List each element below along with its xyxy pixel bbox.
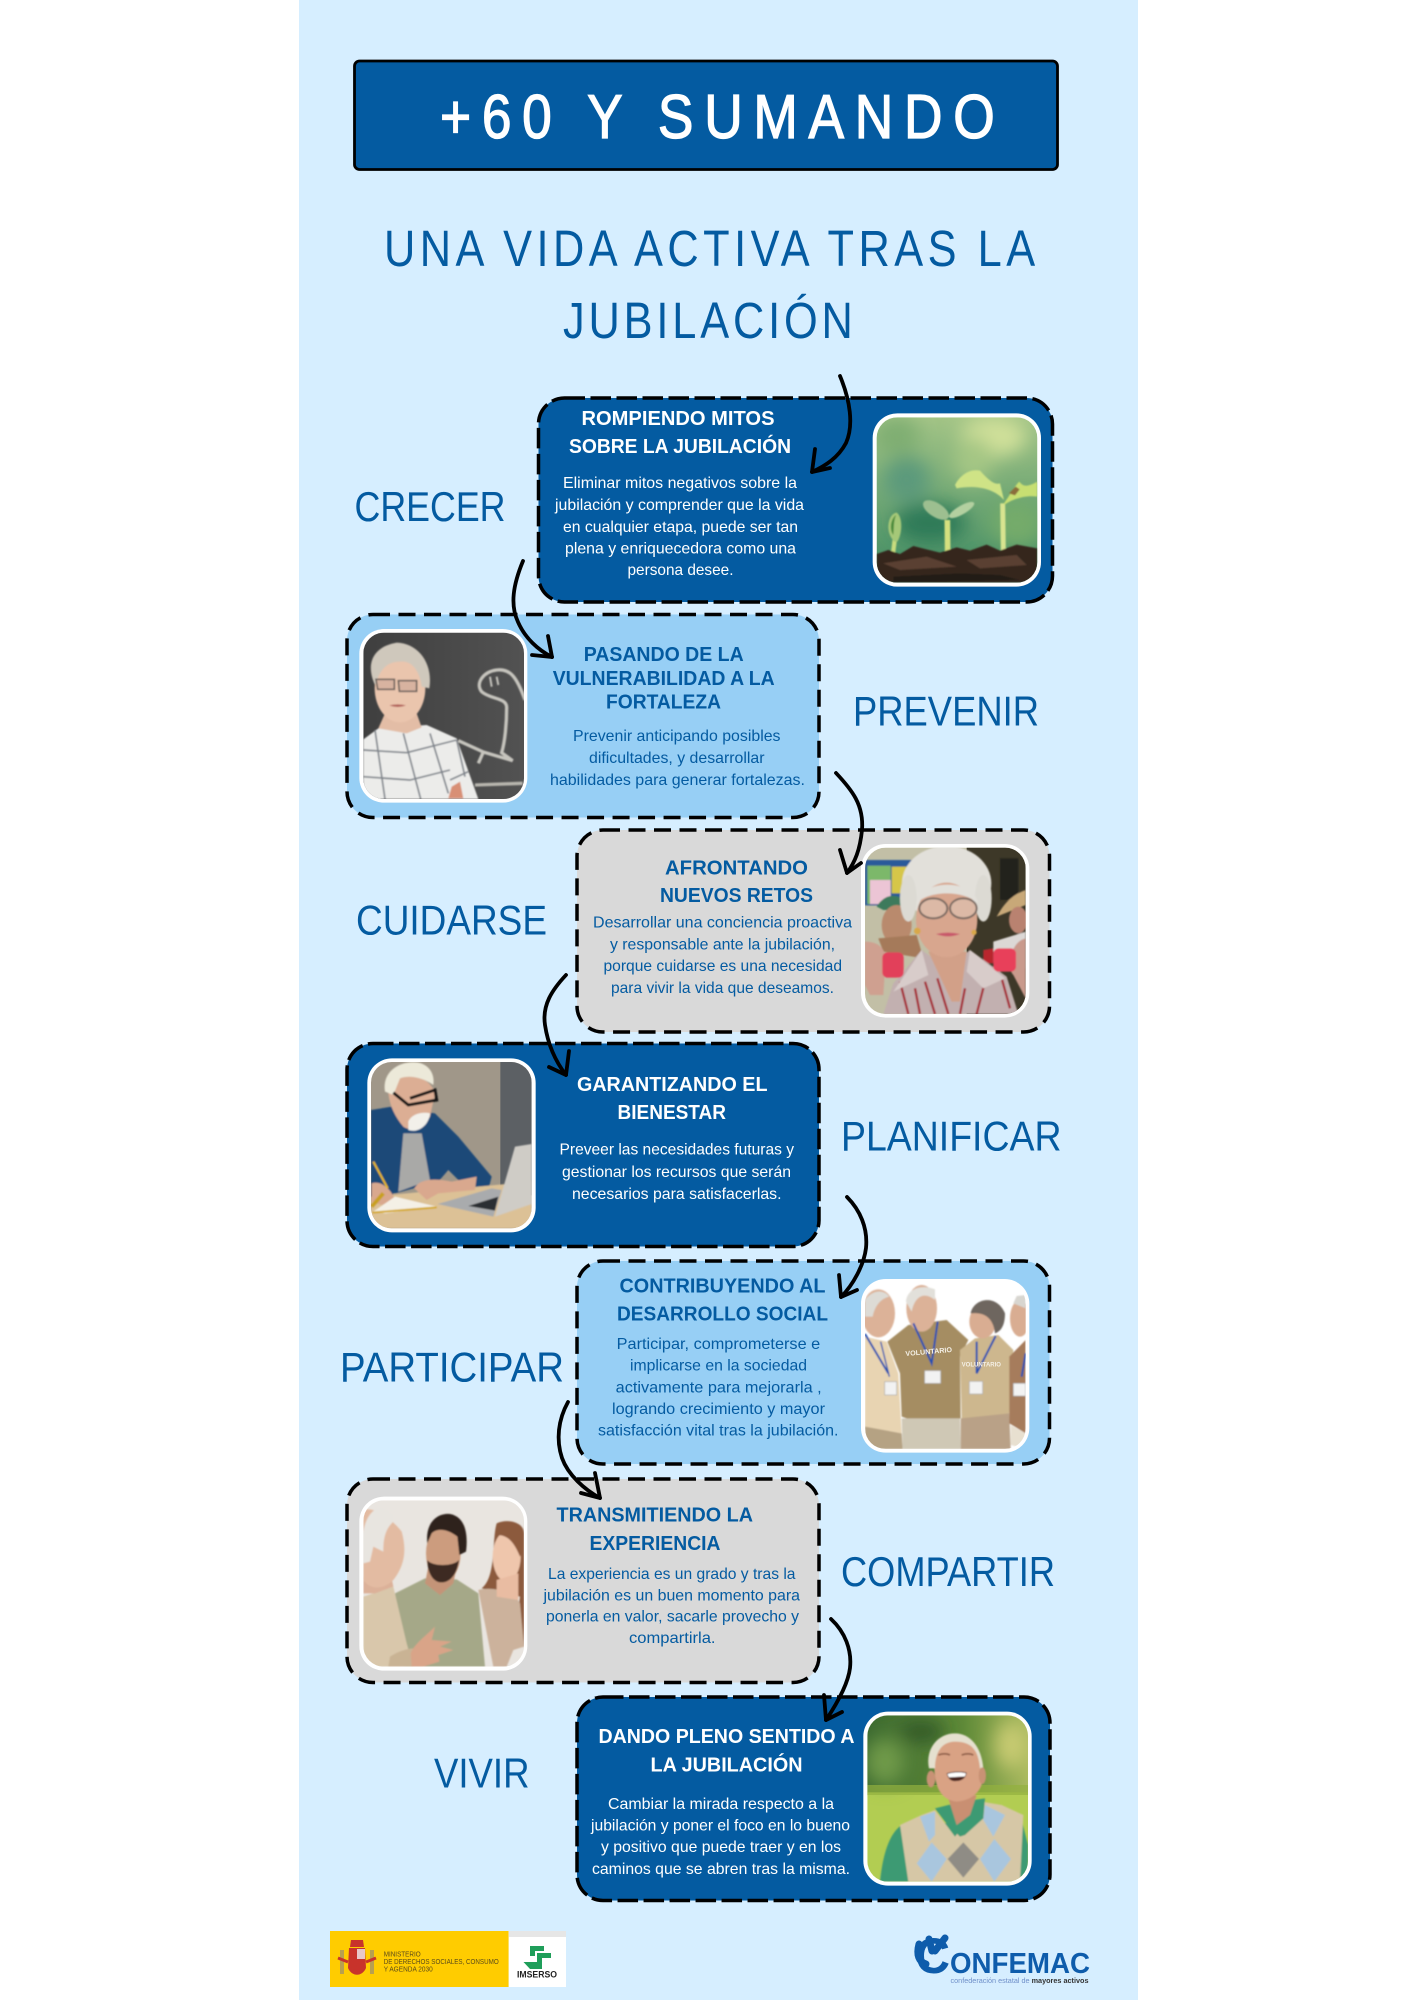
body text: Desarrollar una conciencia proactiva <box>593 914 852 932</box>
heading: BIENESTAR <box>618 1102 727 1124</box>
body text <box>593 914 852 997</box>
arrow: card 4 to card 5 <box>839 1197 866 1297</box>
body text: La experiencia es un grado y tras la <box>548 1566 796 1583</box>
logo: confemac: C <box>915 1928 950 1984</box>
body text <box>554 475 804 579</box>
card background <box>577 830 1050 1032</box>
card background <box>347 1044 819 1246</box>
ministry yellow block <box>330 1931 509 1987</box>
body text: Participar, comprometerse e <box>617 1336 820 1353</box>
panel: dando pleno sentido <box>577 1697 1050 1900</box>
icon: hand fingers <box>918 1938 945 1964</box>
subtitle <box>384 221 1036 350</box>
panel: afrontando nuevos retos <box>577 830 1050 1032</box>
panel: transmitiendo la experiencia <box>347 1479 819 1682</box>
ministry name <box>384 1950 499 1974</box>
photo: seedlings growing <box>873 413 1043 587</box>
body text: compartirla. <box>629 1630 716 1647</box>
panel: contribuyendo al desarrollo social <box>577 1261 1050 1464</box>
body text: ponerla en valor, sacarle provecho y <box>546 1609 799 1626</box>
body text <box>543 1566 800 1647</box>
heading: AFRONTANDO <box>665 858 808 880</box>
photo: senior volunteers: VOLUNTARIO <box>962 1362 1001 1369</box>
body text: Preveer las necesidades futuras y <box>560 1142 794 1158</box>
body text: para vivir la vida que deseamos. <box>611 980 834 997</box>
arrow: title to first card <box>812 376 850 472</box>
body text <box>598 1336 838 1440</box>
heading <box>569 408 791 458</box>
card background <box>347 614 819 818</box>
body text: necesarios para satisfacerlas. <box>572 1186 782 1203</box>
label: cuidarse: CUIDARSE <box>356 896 547 944</box>
subtitle: JUBILACIÓN <box>563 292 853 350</box>
card background <box>577 1261 1050 1464</box>
logo: confemac: ONFEMAC <box>950 1948 1090 1980</box>
body text: jubilación y poner el foco en lo bueno <box>590 1818 850 1835</box>
heading: NUEVOS RETOS <box>660 885 813 907</box>
imserso name: IMSERSO <box>517 1970 557 1981</box>
body text: y responsable ante la jubilación, <box>610 936 835 954</box>
body text: logrando crecimiento y mayor <box>612 1401 826 1418</box>
label: compartir: COMPARTIR <box>841 1548 1055 1595</box>
photo: man writing at laptop <box>367 1058 536 1232</box>
body text: satisfacción vital tras la jubilación. <box>598 1423 838 1440</box>
body text <box>560 1142 794 1203</box>
arrow: card 1 to card 2 <box>513 561 552 657</box>
logo: confemac: confederación estatal de mayores activos <box>950 1978 1089 1985</box>
arrow: card 3 to card 4 <box>544 975 569 1075</box>
label: planificar: PLANIFICAR <box>841 1112 1062 1160</box>
body text: gestionar los recursos que serán <box>562 1164 791 1181</box>
heading: TRANSMITIENDO LA <box>556 1505 753 1527</box>
body text <box>550 728 805 789</box>
heading: DANDO PLENO SENTIDO A <box>598 1726 854 1748</box>
photo: laughing senior man <box>863 1712 1032 1886</box>
arrow: card 5 to card 6 <box>559 1402 600 1498</box>
heading: ROMPIENDO MITOS <box>582 408 774 430</box>
title banner <box>354 61 1058 170</box>
heading <box>553 644 775 714</box>
body text: en cualquier etapa, puede ser tan <box>563 519 798 536</box>
photo: woman and chalk bicep <box>359 629 527 803</box>
body text: porque cuidarse es una necesidad <box>604 958 842 975</box>
heading: SOBRE LA JUBILACIÓN <box>569 434 791 458</box>
heading <box>577 1074 768 1124</box>
card background <box>577 1697 1050 1900</box>
icon: spanish coat of arms <box>338 1940 376 1975</box>
heading <box>660 858 813 907</box>
heading: PASANDO DE LA <box>584 644 744 666</box>
body text: Prevenir anticipando posibles <box>573 728 780 745</box>
arrow: card 2 to card 3 <box>836 773 862 873</box>
icon: imserso mark <box>524 1946 551 1969</box>
background panel <box>299 0 1138 2000</box>
heading: CONTRIBUYENDO AL <box>620 1276 826 1298</box>
imserso block <box>509 1931 566 1987</box>
panel: garantizando el bienestar <box>347 1044 819 1246</box>
photo: senior volunteers <box>861 1279 1030 1453</box>
body text: implicarse en la sociedad <box>630 1358 807 1375</box>
body text: Eliminar mitos negativos sobre la <box>563 475 797 492</box>
subtitle: UNA VIDA ACTIVA TRAS LA <box>384 221 1036 278</box>
label: vivir: VIVIR <box>434 1750 530 1796</box>
heading: GARANTIZANDO EL <box>577 1074 768 1096</box>
body text: dificultades, y desarrollar <box>589 750 765 767</box>
infographic page <box>299 0 1138 2000</box>
body text: Cambiar la mirada respecto a la <box>608 1796 834 1813</box>
label: prevenir: PREVENIR <box>853 688 1039 734</box>
panel: pasando de la vulnerabilidad <box>347 614 819 818</box>
heading: FORTALEZA <box>606 692 721 714</box>
body text: caminos que se abren tras la misma. <box>592 1861 850 1878</box>
logo: ministerio and imserso <box>330 1931 566 1987</box>
card background <box>538 398 1052 602</box>
heading <box>598 1726 854 1777</box>
body text: plena y enriquecedora como una <box>565 540 796 558</box>
heading: LA JUBILACIÓN <box>650 1753 802 1777</box>
body text: y positivo que puede traer y en los <box>601 1839 841 1856</box>
heading <box>556 1505 753 1555</box>
card background <box>347 1479 819 1682</box>
heading <box>617 1276 828 1326</box>
ministry name: Y AGENDA 2030 <box>384 1965 433 1974</box>
heading: VULNERABILIDAD A LA <box>553 668 775 690</box>
photo: senior volunteers: VOLUNTARIO <box>905 1347 953 1358</box>
photo: elderly woman with red dumbbells <box>861 844 1029 1018</box>
panel: rompiendo mitos <box>538 398 1052 602</box>
photo: three generations talking <box>359 1497 527 1671</box>
ministry name: MINISTERIO <box>384 1950 421 1959</box>
body text: persona desee. <box>628 562 734 579</box>
label: crecer: CRECER <box>354 483 506 530</box>
label: participar: PARTICIPAR <box>340 1344 564 1390</box>
arrow: card 6 to card 7 <box>824 1619 850 1720</box>
body text: jubilación es un buen momento para <box>543 1588 800 1605</box>
body text: habilidades para generar fortalezas. <box>550 772 805 789</box>
heading: DESARROLLO SOCIAL <box>617 1304 828 1326</box>
title banner: +60 Y SUMANDO <box>440 83 995 152</box>
body text <box>590 1796 850 1878</box>
logo: confemac <box>915 1928 1090 1985</box>
body text: activamente para mejorarla , <box>616 1380 822 1397</box>
body text: jubilación y comprender que la vida <box>554 497 804 514</box>
heading: EXPERIENCIA <box>590 1533 720 1555</box>
ministry name: DE DERECHOS SOCIALES, CONSUMO <box>384 1957 499 1966</box>
